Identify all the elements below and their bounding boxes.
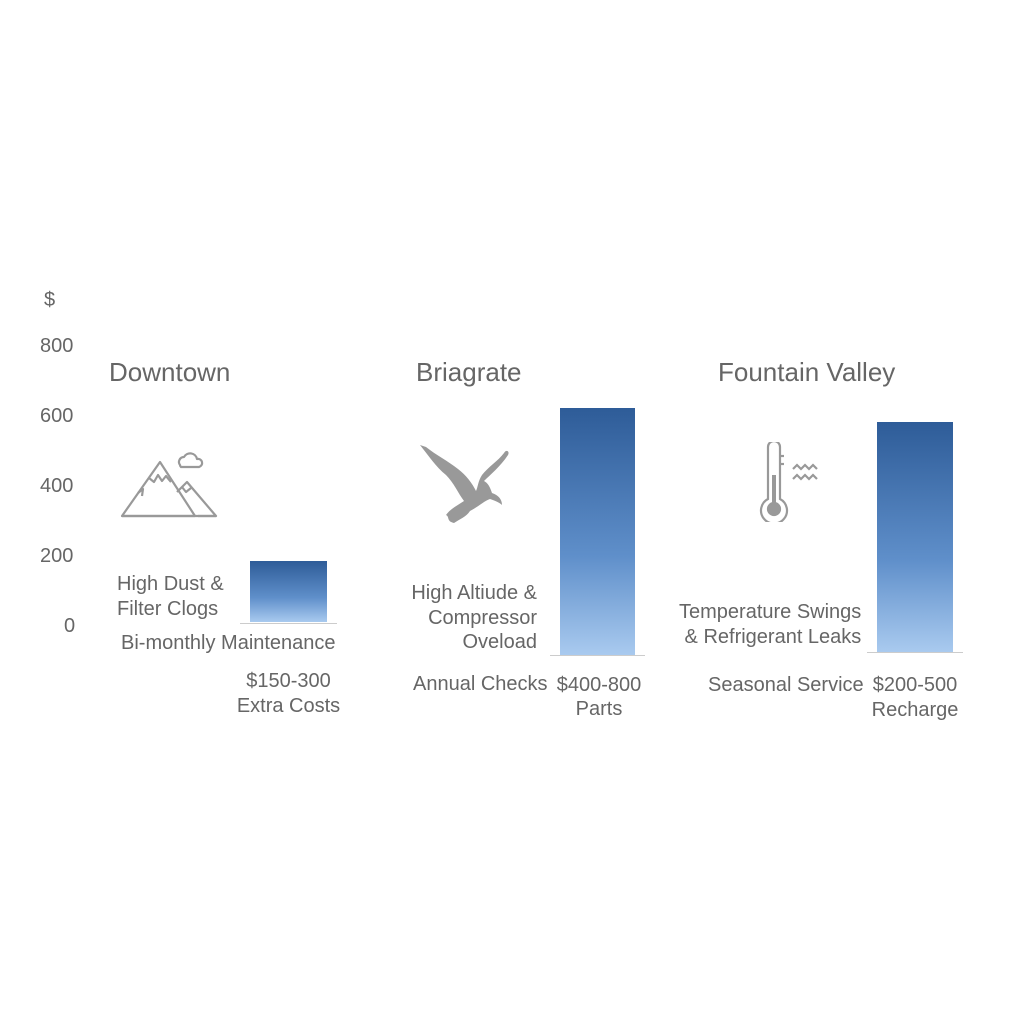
- text: cost: $150-300: [246, 670, 331, 692]
- text: maintenance: Seasonal Service: [708, 674, 864, 696]
- text: cost: Extra Costs: [237, 695, 340, 717]
- panel: Downtown: [109, 357, 340, 717]
- text: issue: Oveload: [462, 631, 537, 653]
- text: issue: [679, 601, 861, 648]
- text: cost: $200-500: [873, 674, 957, 696]
- text: issue: Temperature Swings: [679, 601, 861, 623]
- cost bar: [250, 561, 327, 622]
- text: cost: $400-800: [557, 674, 641, 696]
- y axis: [40, 289, 75, 637]
- text: cost: Recharge: [872, 699, 958, 721]
- heading: Briagrate: [416, 357, 522, 387]
- text: issue: High Dust &: [117, 573, 224, 595]
- icon: thermometer: [760, 442, 818, 522]
- text: maintenance: Annual Checks: [413, 673, 548, 695]
- text: cost: [237, 670, 340, 717]
- text: cost: [557, 674, 641, 720]
- text: issue: [411, 582, 537, 653]
- text: maintenance: Bi-monthly Maintenance: [121, 632, 336, 654]
- text: issue: High Altiude &: [411, 582, 537, 604]
- panel: Briagrate: [411, 357, 645, 720]
- icon: eagle: [420, 445, 508, 523]
- y axis: $: [44, 289, 55, 311]
- heading: Fountain Valley: [718, 357, 895, 387]
- cost bar: [560, 408, 635, 655]
- text: issue: & Refrigerant Leaks: [685, 626, 861, 648]
- y axis: 0: [64, 615, 75, 637]
- y axis: 800: [40, 335, 73, 357]
- text: issue: Filter Clogs: [117, 598, 218, 620]
- text: cost: [872, 674, 958, 721]
- text: issue: [117, 573, 224, 620]
- text: cost: Parts: [576, 698, 622, 720]
- text: issue: Compressor: [428, 606, 537, 628]
- y axis: 400: [40, 475, 73, 497]
- panel: Fountain Valley: [679, 357, 963, 721]
- y axis: 200: [40, 545, 73, 567]
- y axis: 600: [40, 405, 73, 427]
- cost bar: [877, 422, 953, 652]
- heading: Downtown: [109, 357, 230, 387]
- icon: mountain: [120, 452, 218, 518]
